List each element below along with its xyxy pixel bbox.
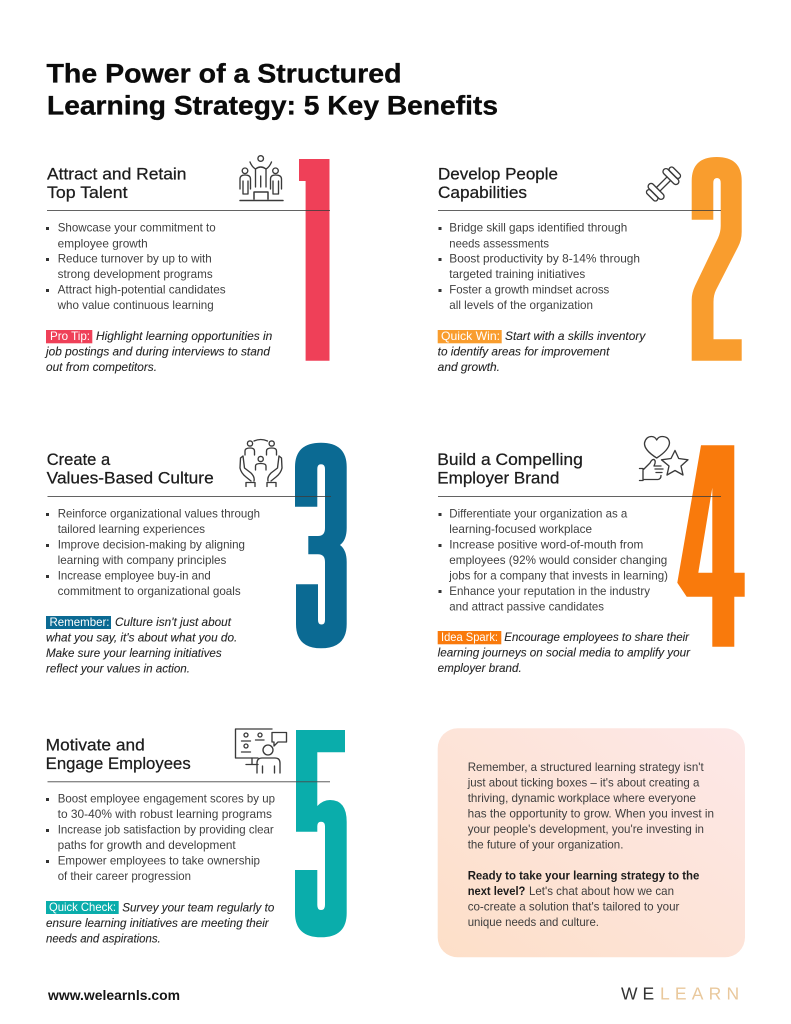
number 2 — [692, 157, 742, 361]
closing paragraph: your people's development, you're investing in — [468, 823, 704, 836]
bullet list: Boost employee engagement scores by up — [58, 793, 275, 806]
icon: presenter at a screen — [236, 729, 286, 773]
heading: Top Talent — [47, 183, 128, 202]
call to action: next level? — [468, 885, 525, 898]
logo: welearn — [621, 983, 744, 1003]
icon: dumbbell — [643, 164, 684, 204]
callout: pro tip: job postings and during interviews to stand — [44, 345, 271, 358]
bullet list: all levels of the organization — [449, 299, 593, 312]
bullet list: Empower employees to take ownership — [58, 855, 260, 868]
heading — [438, 164, 558, 202]
bullet list: jobs for a company that invests in learning) — [448, 570, 668, 583]
bullet list: learning with company principles — [58, 554, 227, 567]
callout: quick check: needs and aspirations. — [46, 932, 161, 946]
callout: quick win — [438, 330, 647, 374]
number 1 — [299, 159, 330, 361]
panel: motivate and engage employees — [46, 729, 347, 946]
bullet list: Enhance your reputation in the industry — [449, 585, 650, 598]
closing paragraph: Remember, a structured learning strategy isn't — [468, 761, 704, 774]
logo: welearn: LEARN — [660, 983, 744, 1003]
callout: pro tip: Pro Tip: — [50, 330, 90, 343]
number 5 — [295, 730, 347, 937]
closing paragraph: just about ticking boxes – it's about creating a — [467, 777, 700, 790]
callout: remember: Make sure your learning initiatives — [46, 647, 222, 660]
panel: create a values-based culture — [46, 440, 347, 676]
bullet list: Bridge skill gaps identified through — [449, 222, 627, 235]
call to action: Ready to take your learning strategy to the — [468, 869, 700, 882]
callout: idea spark: employer brand. — [438, 662, 522, 675]
bullet list: employee growth — [58, 237, 148, 250]
panel: closing message card — [438, 728, 745, 957]
bullet list: of their career progression — [58, 870, 191, 883]
heading: Motivate and — [46, 736, 145, 755]
heading: Engage Employees — [46, 754, 191, 773]
callout: remember: Remember: — [50, 616, 110, 629]
call to action: unique needs and culture. — [468, 916, 599, 929]
heading: Develop People — [438, 164, 558, 183]
callout: pro tip — [44, 330, 272, 374]
heading: Values-Based Culture — [47, 468, 214, 487]
bullet list: Foster a growth mindset across — [449, 284, 609, 297]
bullet list: Boost productivity by 8-14% through — [449, 253, 640, 266]
callout: idea spark: Encourage employees to share their — [504, 631, 690, 644]
icon: heart, star and thumbs up — [640, 436, 688, 480]
bullet list: strong development programs — [58, 268, 213, 281]
bullet list: Improve decision-making by aligning — [58, 538, 245, 551]
title: The Power of a Structured — [46, 58, 401, 88]
callout: idea spark: learning journeys on social media to amplify your — [438, 646, 691, 660]
bullet list: commitment to organizational goals — [58, 585, 241, 598]
bullet list — [46, 507, 260, 598]
bullet list: Reinforce organizational values through — [58, 507, 260, 520]
callout: pro tip: Highlight learning opportunities in — [96, 330, 272, 343]
bullet list: who value continuous learning — [57, 299, 214, 312]
title — [46, 58, 498, 120]
callout: quick win: and growth. — [438, 361, 500, 374]
callout: remember: Culture isn't just about — [115, 616, 232, 629]
icon: hands holding people — [240, 440, 282, 486]
bullet list: Differentiate your organization as a — [449, 507, 628, 520]
heading: Capabilities — [438, 183, 527, 202]
bullet list: Increase positive word-of-mouth from — [449, 538, 643, 551]
callout: idea spark — [438, 631, 691, 675]
closing paragraph — [467, 761, 714, 851]
callout: quick check — [46, 901, 275, 946]
bullet list: learning-focused workplace — [449, 523, 592, 536]
panel: attract and retain top talent — [44, 156, 330, 374]
panel: develop people capabilities — [438, 157, 742, 374]
bullet list — [46, 222, 226, 312]
callout: remember: what you say, it's about what you do. — [46, 632, 237, 644]
heading — [437, 450, 583, 487]
bullet list: Attract high-potential candidates — [58, 284, 226, 297]
bullet list: Showcase your commitment to — [58, 222, 216, 235]
title: Learning Strategy: 5 Key Benefits — [47, 90, 498, 120]
bullet list: paths for growth and development — [58, 839, 236, 852]
heading: Create a — [47, 450, 111, 469]
callout: quick win: Start with a skills inventory — [505, 330, 647, 343]
heading: Attract and Retain — [47, 164, 186, 183]
callout: quick check: Quick Check: — [49, 901, 116, 914]
bullet list: Reduce turnover by up to with — [58, 253, 212, 266]
bullet list — [438, 222, 640, 312]
closing paragraph: has the opportunity to grow. When you invest in — [468, 807, 714, 820]
closing paragraph: thriving, dynamic workplace where everyone — [468, 792, 696, 805]
callout: remember: reflect your values in action. — [46, 662, 190, 676]
bullet list: needs assessments — [449, 237, 549, 250]
bullet list: targeted training initiatives — [449, 268, 585, 281]
closing paragraph: the future of your organization. — [468, 838, 623, 851]
callout: pro tip: out from competitors. — [46, 361, 157, 374]
callout: remember — [46, 616, 237, 676]
icon: podium with three people — [240, 156, 283, 200]
number 3 — [295, 443, 347, 648]
heading — [47, 450, 214, 487]
panel: build a compelling employer brand — [437, 436, 745, 675]
heading — [47, 164, 186, 202]
bullet list: employees (92% would consider changing — [449, 554, 667, 567]
bullet list — [46, 793, 275, 883]
bullet list: Increase job satisfaction by providing clear — [58, 824, 274, 837]
heading: Build a Compelling — [437, 450, 583, 469]
footer url: www.welearnls.com — [47, 988, 180, 1003]
callout: quick check: ensure learning initiatives are meeting their — [46, 917, 270, 930]
bullet list: tailored learning experiences — [58, 523, 205, 536]
callout: quick win: to identify areas for improvement — [438, 345, 610, 358]
logo: welearn: WE — [621, 983, 659, 1003]
number 4 — [677, 445, 745, 647]
callout: idea spark: Idea Spark: — [441, 631, 498, 644]
bullet list — [438, 507, 668, 613]
bullet list: and attract passive candidates — [449, 600, 604, 613]
call to action: co-create a solution that's tailored to your — [468, 900, 680, 913]
heading: Employer Brand — [437, 468, 559, 487]
bullet list: Increase employee buy-in and — [58, 570, 211, 583]
heading — [46, 736, 191, 773]
call to action — [468, 869, 700, 929]
call to action: Let's chat about how we can — [529, 885, 674, 898]
callout: quick check: Survey your team regularly to — [122, 902, 275, 914]
bullet list: to 30-40% with robust learning programs — [58, 808, 272, 821]
callout: quick win: Quick Win: — [441, 330, 500, 343]
